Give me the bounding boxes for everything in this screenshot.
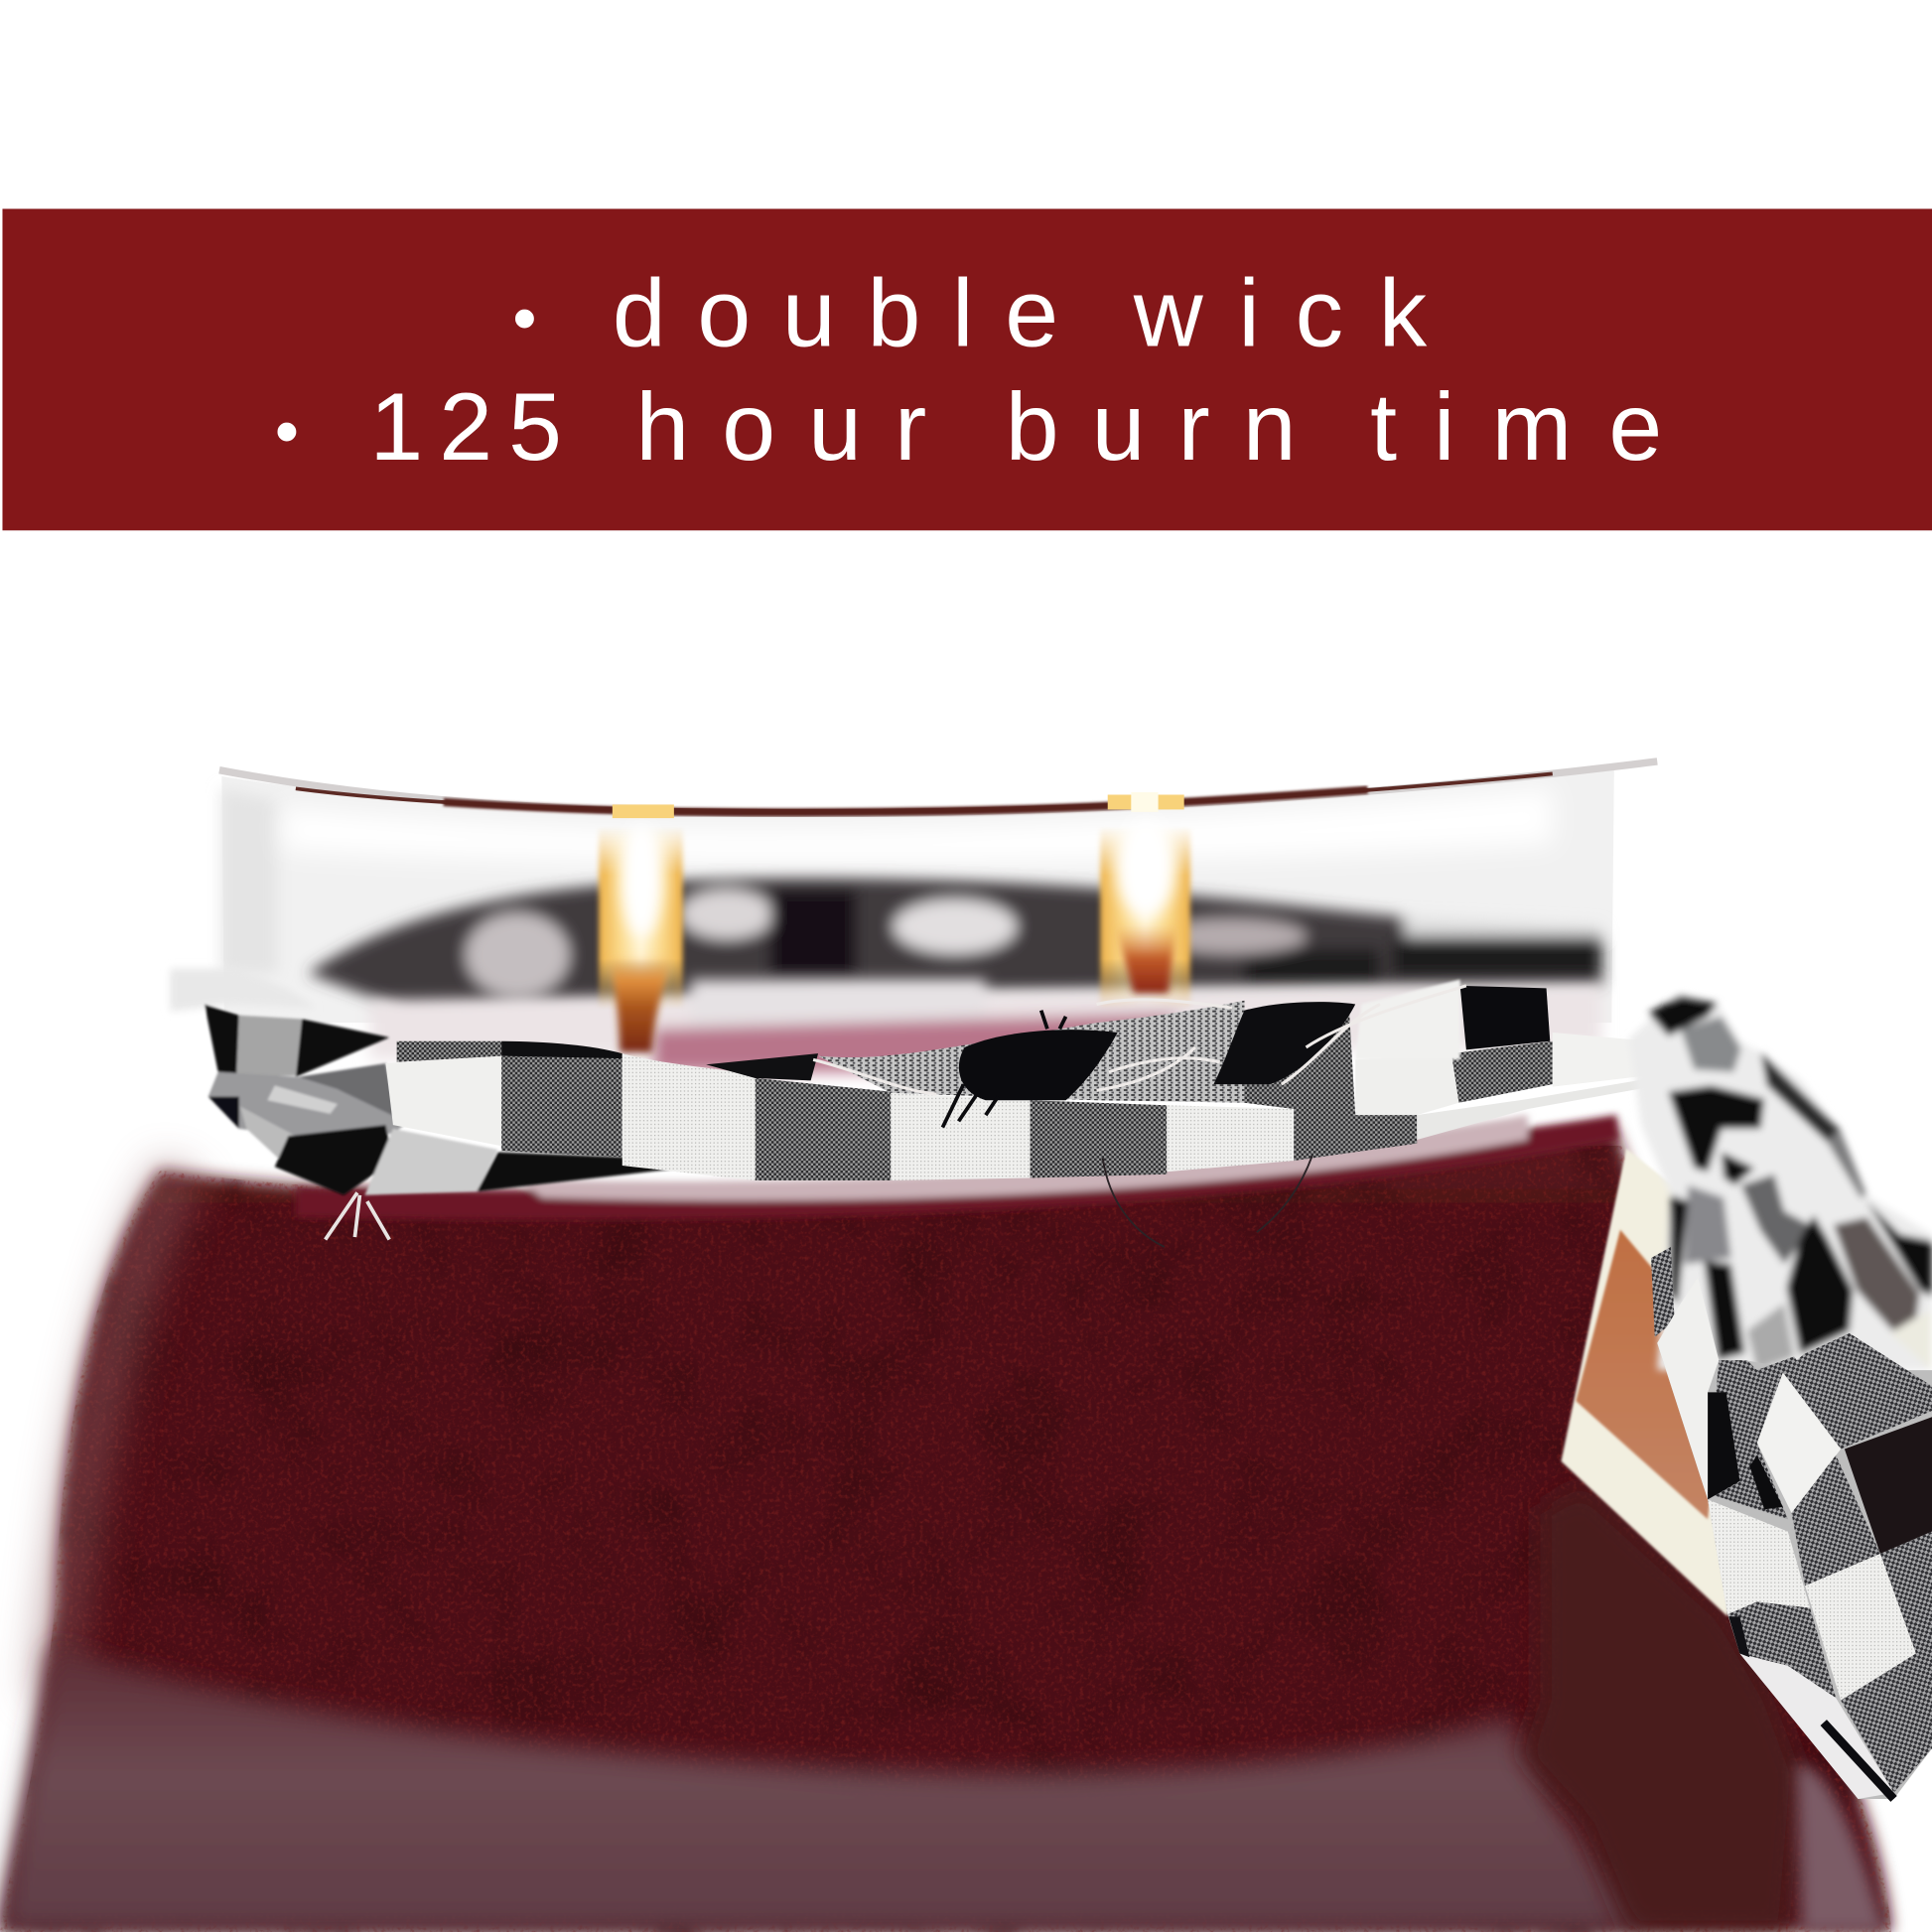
feature text: double wick [613, 259, 1428, 367]
frayed black checks [942, 986, 1550, 1128]
feature text: double wick: double [613, 259, 1058, 367]
feature text: 125 hour burn time: burn [1006, 372, 1297, 481]
faded left edge of wax [31, 1159, 204, 1701]
ribbon tail [1629, 993, 1932, 1799]
lower right pale wax [1796, 1764, 1885, 1932]
plaid ribbon left knot [170, 968, 692, 1195]
candle jar photo [0, 761, 1932, 1932]
plaid ribbon main band [385, 980, 1657, 1180]
feature text: double wick: wick [1133, 259, 1428, 367]
pale wax rim seen through glass [369, 980, 1601, 1072]
glass rim line [219, 761, 1657, 813]
stray threads [1103, 1156, 1312, 1247]
right flame [1100, 819, 1190, 1011]
gift tag [1561, 1149, 1749, 1616]
feature text: 125 hour burn time: 125 [369, 372, 562, 481]
bullet point: double wick: • [512, 279, 537, 356]
bullet point: 125 hour burn time: • [275, 392, 299, 470]
white fringe threads [813, 986, 1466, 1094]
tail lower base [1657, 1343, 1932, 1799]
ribbon fringe left [326, 1192, 389, 1240]
bright band below rim [283, 788, 1553, 865]
glass left wall shading [221, 788, 277, 973]
feature text: 125 hour burn time: hour [635, 372, 926, 481]
banner [2, 208, 1932, 530]
wax body [0, 1128, 1932, 1932]
feature text: 125 hour burn time: time [1370, 372, 1662, 481]
lower pale wax zone [0, 1645, 1651, 1932]
banner background [2, 208, 1932, 530]
tail blurred upper folds [1629, 993, 1932, 1370]
flame highlights crossing the rim [613, 792, 1184, 818]
blurred far side of ribbon seen through glass [308, 877, 1601, 1011]
left flame [599, 824, 683, 1052]
lower right brown shadow [1522, 1484, 1801, 1932]
glass band reflection below ribbon [296, 1115, 1619, 1220]
glass jar upper wall [221, 770, 1614, 1023]
tail sharp checks [1651, 1247, 1675, 1337]
feature text: 125 hour burn time [369, 372, 1662, 481]
